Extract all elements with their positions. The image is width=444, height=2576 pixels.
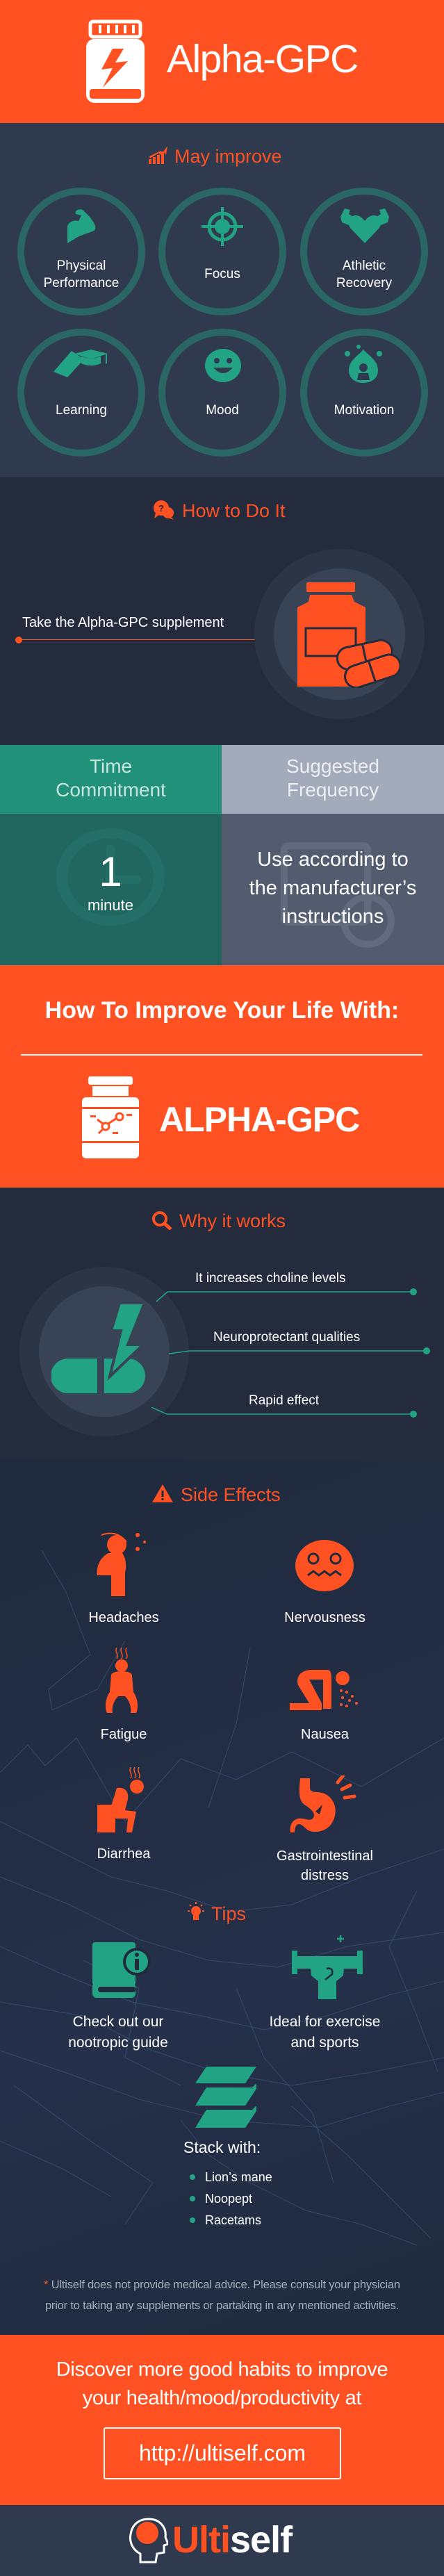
icon: jar with molecule — [82, 1076, 139, 1158]
item: nausea: Nausea — [301, 1727, 349, 1742]
panel: call to action — [0, 2335, 444, 2505]
tip: nootropic guide — [68, 1942, 168, 2051]
footer — [0, 2505, 444, 2576]
title: Alpha-GPC — [167, 37, 358, 81]
panel: how to improve — [0, 965, 444, 1188]
item: physical performance — [17, 188, 145, 315]
icon: clock with value — [56, 828, 165, 926]
callout: choline — [156, 1271, 417, 1302]
item: headaches — [88, 1533, 159, 1625]
item: nervousness: Nervousness — [284, 1610, 365, 1625]
item: focus: Focus — [204, 267, 240, 281]
icon: capsule with lightning — [19, 1267, 189, 1436]
callout: neuroprotectant — [169, 1330, 430, 1354]
tip: stack with: Stack with: — [183, 2138, 261, 2156]
header: time commitment — [0, 745, 222, 814]
item: gastrointestinal distress: Gastrointestinal — [277, 1848, 373, 1864]
item: diarrhea — [97, 1767, 150, 1862]
panel: why it works — [0, 1188, 444, 1460]
tip: nootropic guide: Check out our — [73, 2014, 163, 2030]
tip: exercise and sports — [270, 1935, 380, 2051]
disclaimer — [44, 2279, 400, 2312]
text: frequency: the manufacturer’s — [249, 877, 416, 899]
url button: http://ultiself.com — [139, 2440, 306, 2466]
icon: faint calendar — [281, 842, 395, 948]
tip: exercise and sports: Ideal for exercise — [270, 2014, 380, 2030]
panel: side effects and tips — [0, 1460, 444, 2335]
tip: stack with: Noopept — [205, 2192, 252, 2206]
logo: Ultiself — [172, 2519, 292, 2561]
item: fatigue: Fatigue — [101, 1727, 147, 1742]
item: mood: Mood — [206, 403, 239, 418]
callout: rapid effect — [151, 1393, 417, 1418]
heading: may improve: May improve — [174, 146, 282, 167]
header: time commitment: Time — [90, 755, 132, 777]
item: mood — [158, 329, 286, 457]
tip: stack with — [183, 2067, 272, 2227]
item: motivation: Motivation — [334, 403, 394, 418]
item: gastrointestinal distress — [277, 1775, 373, 1883]
header: suggested frequency: Frequency — [287, 779, 379, 801]
panel: may improve — [0, 123, 444, 477]
logo — [129, 2518, 293, 2563]
item: motivation — [300, 329, 428, 457]
callout: rapid effect: Rapid effect — [249, 1393, 319, 1408]
heading: why it works: Why it works — [179, 1211, 286, 1231]
item: learning: Learning — [56, 403, 107, 418]
item: headaches: Headaches — [88, 1610, 159, 1625]
icon: clock with value: minute — [88, 896, 133, 914]
item: gastrointestinal distress: distress — [301, 1868, 349, 1883]
item: nausea — [290, 1670, 358, 1742]
url button — [104, 2427, 341, 2479]
callout: take the supplement — [15, 615, 254, 643]
heading: side effects: Side Effects — [181, 1484, 281, 1505]
item: athletic recovery — [300, 188, 428, 315]
text: frequency: instructions — [282, 905, 384, 928]
item: athletic recovery: Recovery — [336, 276, 392, 290]
text: frequency — [249, 848, 416, 928]
panel: time commitment — [0, 745, 222, 965]
icon: header jar — [86, 19, 145, 103]
tip: nootropic guide: nootropic guide — [68, 2035, 168, 2051]
icon: clock with value: 1 — [99, 848, 122, 895]
disclaimer: * Ultiself does not provide medical advice. Please consult your physician — [44, 2279, 400, 2291]
panel: how to do it — [0, 477, 444, 745]
tip: exercise and sports: and sports — [290, 2035, 359, 2051]
cta text: your health/mood/productivity at — [83, 2387, 361, 2409]
header: suggested frequency — [222, 745, 444, 814]
item: physical performance: Physical — [57, 259, 106, 273]
tip: stack with: Racetams — [205, 2213, 261, 2227]
icon: supplement jar with pills — [254, 549, 425, 719]
callout: choline: It increases choline levels — [195, 1271, 346, 1286]
panel: suggested frequency — [222, 745, 444, 965]
item: nervousness — [284, 1540, 365, 1625]
cta text: Discover more good habits to improve — [56, 2358, 388, 2381]
item: learning — [17, 329, 145, 457]
title: alpha-gpc: ALPHA-GPC — [159, 1100, 359, 1139]
item: fatigue — [101, 1648, 147, 1742]
text: frequency: Use according to — [257, 848, 409, 871]
header: time commitment: Commitment — [56, 779, 166, 801]
item: physical performance: Performance — [44, 276, 119, 290]
cta text — [56, 2358, 388, 2409]
disclaimer: prior to taking any supplements or partaking in any mentioned activities. — [45, 2299, 399, 2312]
header: suggested frequency: Suggested — [286, 755, 379, 777]
callout: neuroprotectant: Neuroprotectant qualities — [213, 1330, 360, 1345]
heading: how to do it: How to Do It — [182, 500, 286, 521]
heading: how to do it: ? — [158, 503, 164, 514]
heading: tips: Tips — [211, 1903, 246, 1924]
item: athletic recovery: Athletic — [343, 259, 386, 273]
heading: tips — [188, 1902, 246, 1924]
header — [0, 0, 444, 123]
tip: stack with: Lion’s mane — [205, 2170, 272, 2184]
callout: take the supplement: Take the Alpha-GPC supplement — [22, 615, 224, 630]
item: diarrhea: Diarrhea — [97, 1846, 150, 1862]
heading: how to improve: How To Improve Your Life With: — [45, 997, 399, 1024]
item: focus — [158, 188, 286, 315]
